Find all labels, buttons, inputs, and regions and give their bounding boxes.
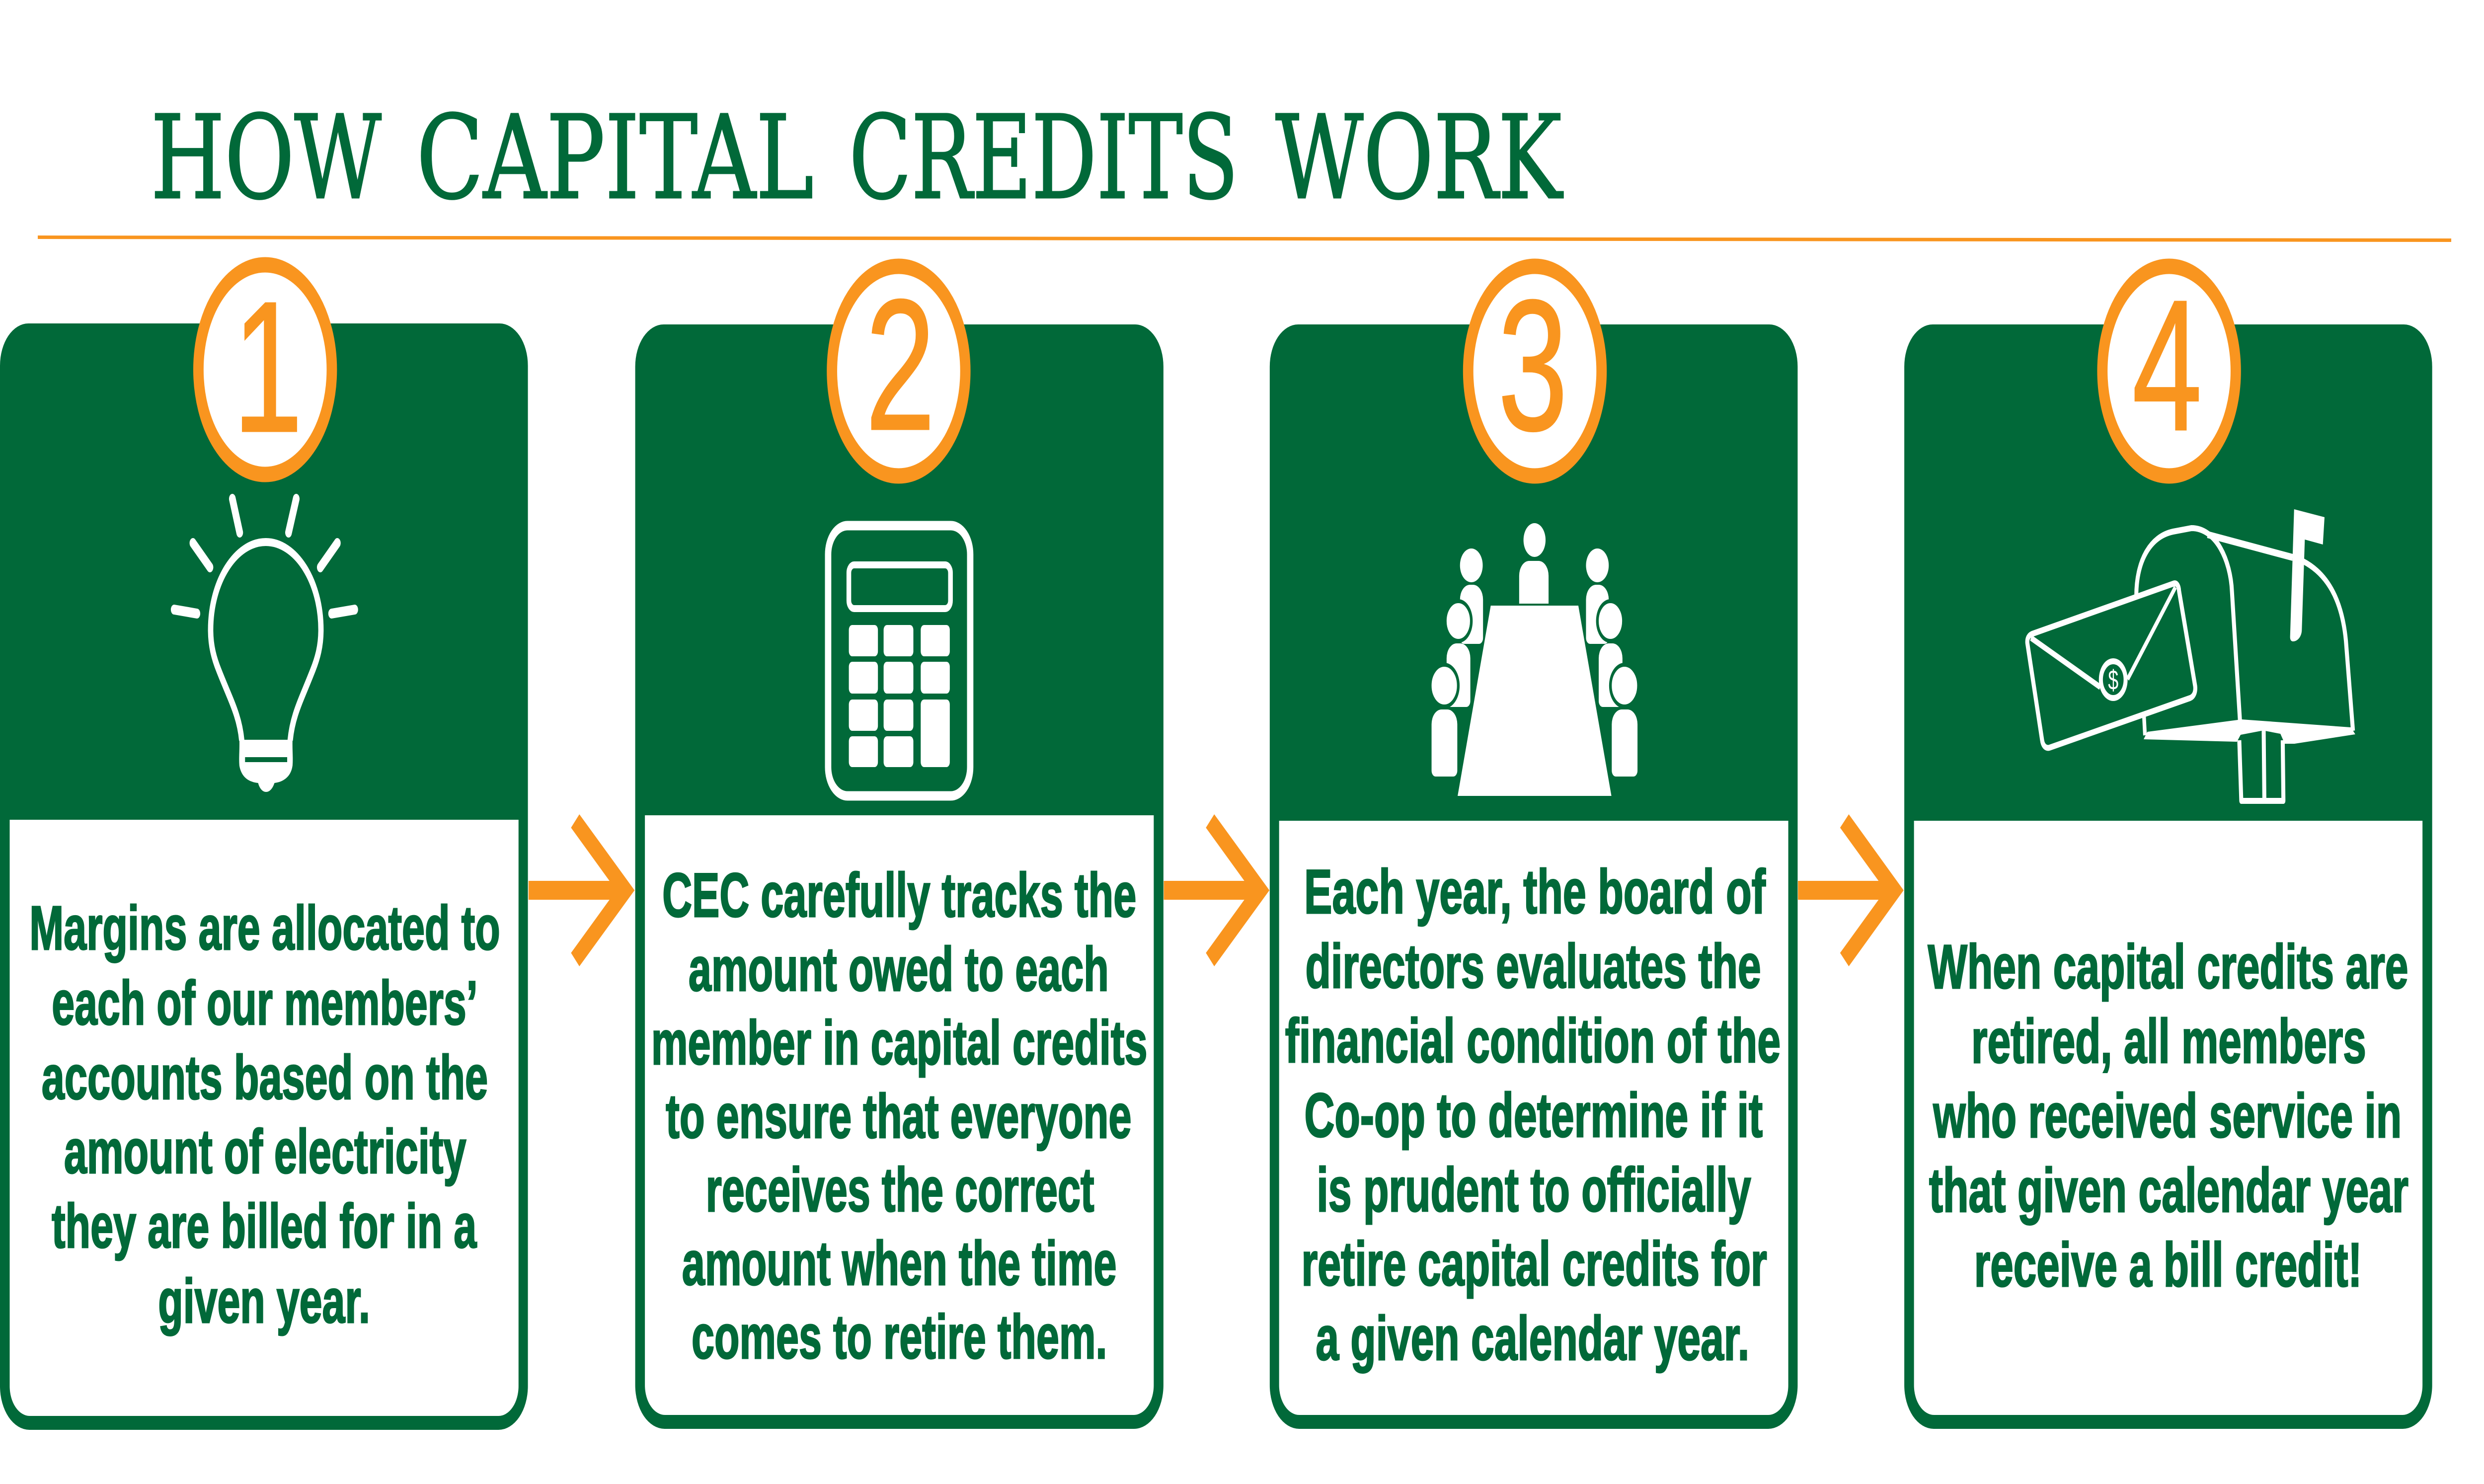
step 1 description: Margins are allocated to [29,893,500,963]
step 2 description: receives the correct [706,1155,1094,1225]
step 1 description [29,893,500,1336]
icon: calculator [828,526,970,796]
icon: mailbox with envelope: $ [2108,665,2118,696]
title [151,90,1563,225]
number badge 1: 1 [233,263,303,471]
panel 3 frame [1270,324,1797,1429]
icon: board of directors around a table [1430,523,1638,796]
number badge 4 [2102,261,2236,476]
step 1 description: each of our members’ [52,968,478,1038]
number badge 3 [1468,261,1602,476]
step 1 description: amount of electricity [64,1117,466,1186]
step 1 description: given year. [158,1266,370,1336]
step 4 description [1928,932,2408,1300]
step 3 description [1285,857,1781,1373]
step 1 description: accounts based on the [42,1043,488,1112]
panel 3 text area [1279,821,1788,1415]
step 4 description: who received service in [1933,1081,2402,1151]
arrow: step 1 to step 2 [529,814,634,966]
panel: step 2 [635,261,1164,1429]
number badge 3: 3 [1498,261,1568,469]
panel: step 1 [0,263,528,1430]
panel 4 frame [1904,324,2432,1429]
title: CREDITS [849,90,1239,225]
panel 1 frame [0,323,528,1430]
step 2 description: amount when the time [682,1229,1117,1298]
icon: light bulb [174,499,355,792]
step 2 description: comes to retire them. [692,1302,1107,1372]
step 3 description: a given calendar year. [1316,1304,1749,1373]
number badge 2: 2 [865,261,935,469]
step 3 description: directors evaluates the [1306,932,1761,1001]
step 3 description: retire capital credits for [1301,1229,1767,1299]
arrow: step 2 to step 3 [1164,814,1269,966]
step 2 description: amount owed to each [689,935,1109,1004]
step 2 description [651,860,1148,1372]
step 4 description: that given calendar year [1929,1156,2408,1225]
step 2 description: CEC carefully tracks the [662,860,1136,930]
number badge 1 [198,263,332,474]
title: HOW [151,90,382,225]
icon: mailbox with envelope [2027,509,2355,801]
step 4 description: receive a bill credit! [1974,1230,2362,1300]
step 4 description: retired, all members [1971,1007,2366,1076]
number badge 2 [832,261,965,476]
step 2 description: member in capital credits [651,1008,1148,1078]
number badge 4: 4 [2132,261,2202,469]
panel: step 3 [1270,261,1797,1429]
step 3 description: is prudent to officially [1317,1155,1751,1225]
panel 2 frame [635,324,1164,1429]
panel 4 text area [1914,821,2422,1415]
title: WORK [1275,90,1563,225]
step 3 description: Co-op to determine if it [1305,1081,1763,1150]
title: CAPITAL [416,90,814,225]
panel 2 text area [645,815,1154,1415]
step 2 description: to ensure that everyone [666,1082,1132,1151]
step 3 description: financial condition of the [1285,1006,1781,1076]
panel 1 text area [10,820,519,1416]
step 3 description: Each year, the board of [1304,857,1766,927]
step 1 description: they are billed for in a [52,1191,477,1261]
panel: step 4 [1904,261,2432,1429]
arrow: step 3 to step 4 [1798,814,1904,966]
header rule [38,235,2451,242]
step 4 description: When capital credits are [1928,932,2408,1002]
